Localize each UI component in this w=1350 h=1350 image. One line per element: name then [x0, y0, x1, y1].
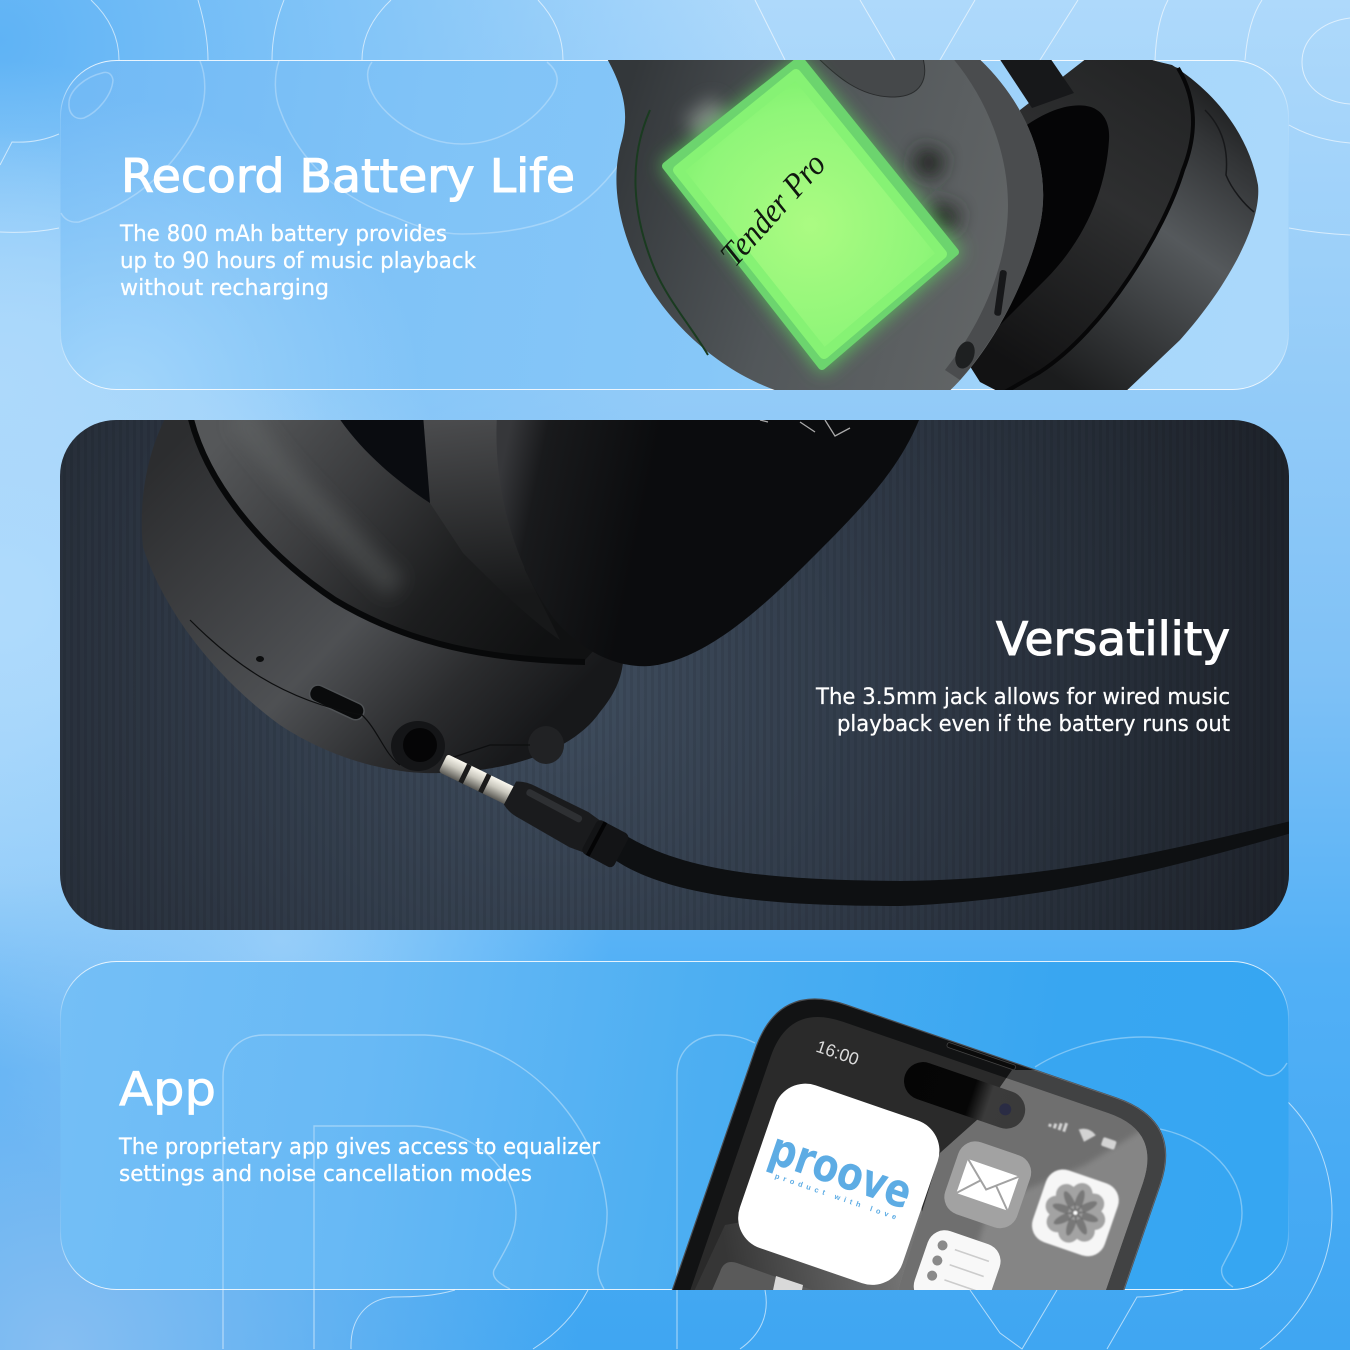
pad seam — [190, 415, 585, 662]
versatility heading: Versatility — [996, 612, 1230, 666]
app description — [118, 1135, 601, 1187]
led dot — [256, 656, 264, 662]
large front cup — [496, 415, 921, 666]
lower screen wallpaper — [690, 1190, 930, 1300]
jack metal plug — [439, 754, 516, 805]
pad seam — [1005, 68, 1193, 392]
pad inner hollow — [1000, 105, 1109, 325]
wallpaper light band — [960, 1125, 1170, 1300]
mail app icon — [939, 1136, 1036, 1233]
screen glare — [895, 1070, 1200, 1300]
outer right shell — [1000, 55, 1258, 395]
versatility description: The 3.5mm jack allows for wired music — [815, 685, 1230, 710]
panel: versatility — [60, 415, 1295, 930]
battery life description — [119, 222, 476, 301]
cup shell — [142, 415, 624, 773]
reminders app icon — [909, 1225, 1005, 1322]
panel 1 faint outline shapes — [61, 61, 620, 234]
battery life heading: Record Battery Life — [121, 149, 575, 203]
cable — [608, 820, 1295, 906]
versatility description: playback even if the battery runs out — [837, 712, 1230, 737]
panel 2 dark card — [60, 420, 1289, 930]
speaker slot — [946, 1042, 1016, 1070]
Proove app tile — [729, 1075, 948, 1294]
battery life description: up to 90 hours of music playback — [120, 249, 476, 274]
usb-c port — [310, 685, 365, 720]
illustration: phone with app — [672, 998, 1166, 1290]
panel 1 glass card — [60, 60, 1288, 390]
phone corner halo — [1070, 1107, 1166, 1203]
battery life description: without recharging — [120, 276, 329, 301]
front camera — [998, 1102, 1013, 1117]
headphone jack socket — [391, 721, 445, 771]
panel 3 glass card — [60, 962, 1288, 1290]
right ear pad — [966, 55, 1193, 395]
panel 3 faint outline shapes — [223, 1035, 1287, 1290]
phone screen — [689, 1017, 1147, 1295]
panel: app — [60, 962, 1288, 1322]
top button strip — [820, 60, 926, 98]
side button — [528, 726, 564, 764]
dynamic island — [899, 1057, 1030, 1134]
pad highlight ridge — [240, 415, 397, 587]
battery life description: The 800 mAh battery provides — [119, 222, 447, 247]
Tender Pro signature: Tender Pro — [713, 146, 833, 273]
battery glow — [660, 55, 962, 374]
pad inner surface — [424, 420, 524, 568]
clock time: 16:00 — [814, 1036, 862, 1069]
Proove tagline: product with love — [774, 1171, 898, 1222]
shell accent line — [1205, 110, 1254, 212]
photos app icon — [1027, 1165, 1124, 1261]
app heading: App — [119, 1062, 216, 1116]
seam line — [190, 620, 530, 765]
versatility description — [815, 685, 1230, 737]
phone body — [671, 999, 1166, 1295]
illustration: headphone with jack cable — [142, 415, 1295, 906]
internal components — [685, 97, 961, 233]
Proove logo: proove — [763, 1121, 919, 1220]
status icons — [1047, 1117, 1118, 1152]
app description: The proprietary app gives access to equalizer — [118, 1135, 601, 1160]
bezel glare — [895, 1070, 1200, 1300]
headband — [1000, 60, 1074, 108]
jack connector body — [504, 782, 628, 868]
signature fragment — [760, 420, 850, 436]
green battery — [666, 60, 955, 366]
side usb port and jack — [994, 270, 1007, 316]
cup green trim — [635, 110, 708, 355]
app description: settings and noise cancellation modes — [119, 1162, 532, 1187]
panel: record battery life — [60, 55, 1288, 395]
cup outer rim — [945, 55, 1043, 380]
dark widget tile — [710, 1262, 826, 1295]
translucent ear cup — [605, 55, 1043, 395]
pad inner hollow — [337, 415, 430, 503]
illustration: headphones with glowing battery — [605, 55, 1258, 395]
ear pad — [194, 420, 592, 660]
